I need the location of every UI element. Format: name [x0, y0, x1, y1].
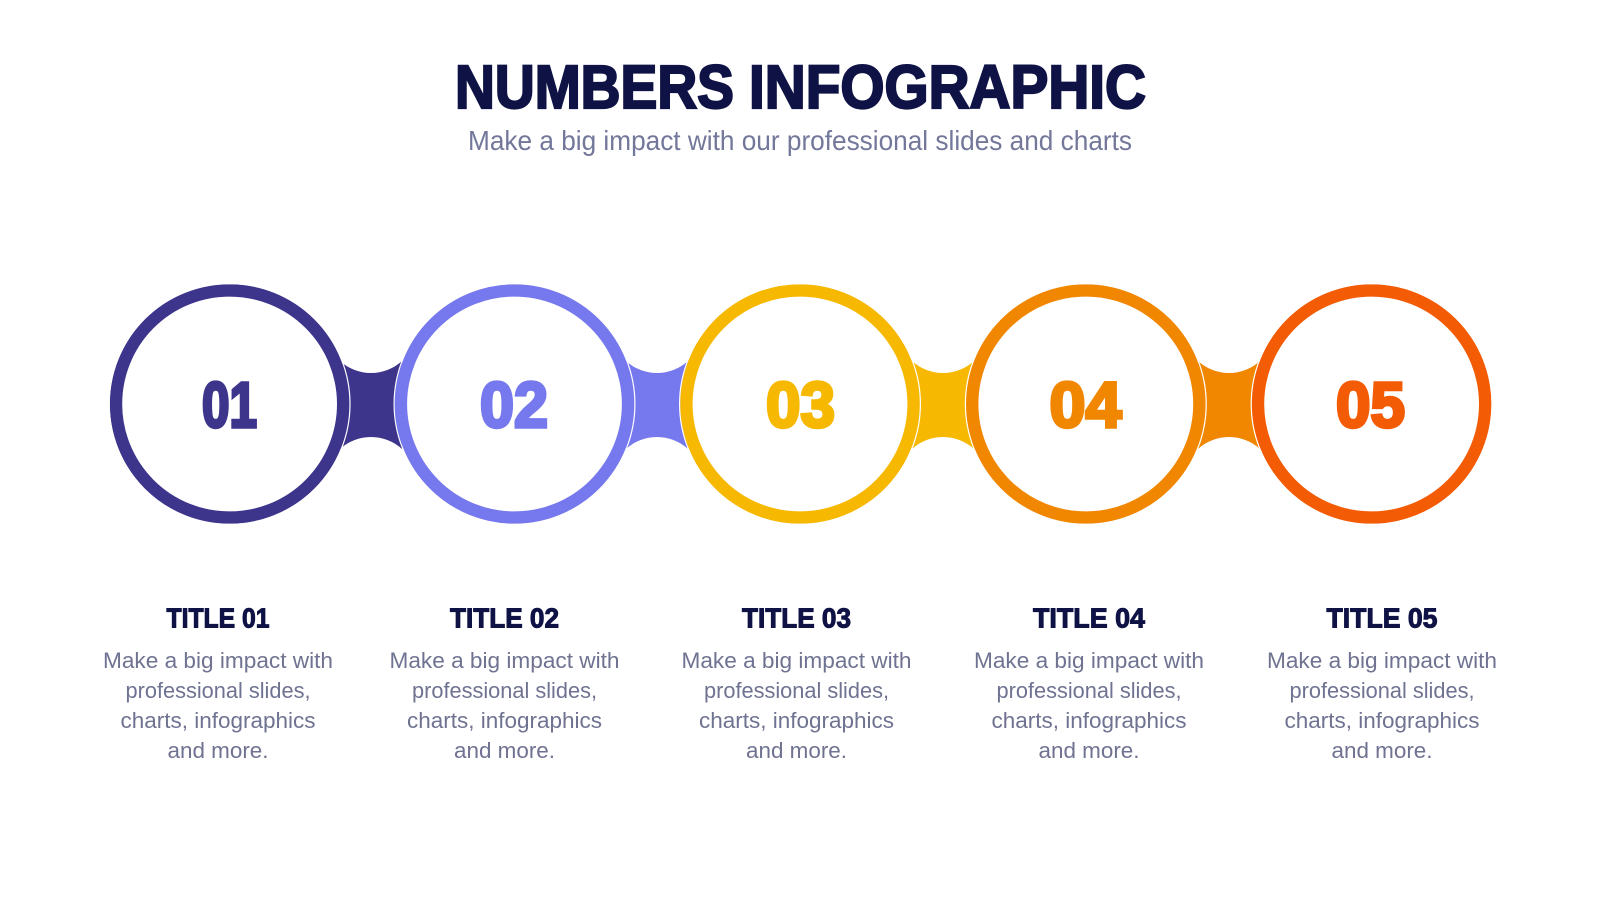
- heading 01: TITLE 01: [166, 602, 270, 634]
- connector 2-3: [626, 361, 688, 449]
- description 01: [103, 648, 333, 763]
- description 05: and more.: [1332, 738, 1432, 763]
- description 05: Make a big impact with: [1267, 648, 1497, 673]
- description 02: [390, 648, 620, 763]
- description 03: charts, infographics: [699, 708, 894, 733]
- description 02: professional slides,: [412, 678, 597, 703]
- heading 03: TITLE 03: [742, 602, 851, 634]
- description 03: Make a big impact with: [682, 648, 912, 673]
- description 05: [1267, 648, 1497, 763]
- step 2 circle: [394, 284, 635, 524]
- connector 3-4: [912, 361, 974, 449]
- description 04: professional slides,: [996, 678, 1182, 703]
- text block 05: [1267, 602, 1497, 763]
- connector 1-2: [340, 361, 402, 449]
- description 05: professional slides,: [1290, 678, 1474, 703]
- heading 05: TITLE 05: [1326, 602, 1438, 634]
- description 02: charts, infographics: [407, 708, 602, 733]
- subtitle: Make a big impact with our professional slides and charts: [468, 125, 1132, 156]
- title: [455, 53, 1146, 121]
- description 02: and more.: [454, 738, 555, 763]
- description 03: professional slides,: [704, 678, 889, 703]
- description 03: and more.: [746, 738, 847, 763]
- text block 03: [682, 602, 912, 763]
- title: INFOGRAPHIC: [749, 53, 1146, 121]
- title: NUMBERS: [455, 53, 734, 121]
- heading 02: TITLE 02: [450, 602, 559, 634]
- number 05: 05: [1336, 369, 1405, 441]
- description 01: professional slides,: [126, 678, 310, 703]
- description 04: charts, infographics: [992, 708, 1186, 733]
- description 05: charts, infographics: [1284, 708, 1480, 733]
- step 4 circle: [965, 284, 1206, 524]
- description 03: [682, 648, 912, 763]
- description 04: Make a big impact with: [974, 648, 1204, 673]
- description 04: and more.: [1038, 738, 1140, 763]
- text block 04: [974, 602, 1204, 763]
- number 02: 02: [480, 369, 548, 441]
- description 01: charts, infographics: [120, 708, 316, 733]
- number 01: 01: [202, 369, 257, 441]
- connector 4-5: [1198, 361, 1260, 449]
- description 01: Make a big impact with: [103, 648, 333, 673]
- description 01: and more.: [168, 738, 268, 763]
- text block 02: [390, 602, 620, 763]
- step 1 circle: [109, 284, 350, 524]
- number 03: 03: [766, 369, 835, 441]
- text block 01: [103, 602, 333, 763]
- step 3 circle: [680, 284, 920, 524]
- step 5 circle: [1251, 284, 1492, 524]
- description 04: [974, 648, 1204, 763]
- number 04: 04: [1050, 369, 1122, 441]
- heading 04: TITLE 04: [1033, 602, 1146, 634]
- description 02: Make a big impact with: [390, 648, 620, 673]
